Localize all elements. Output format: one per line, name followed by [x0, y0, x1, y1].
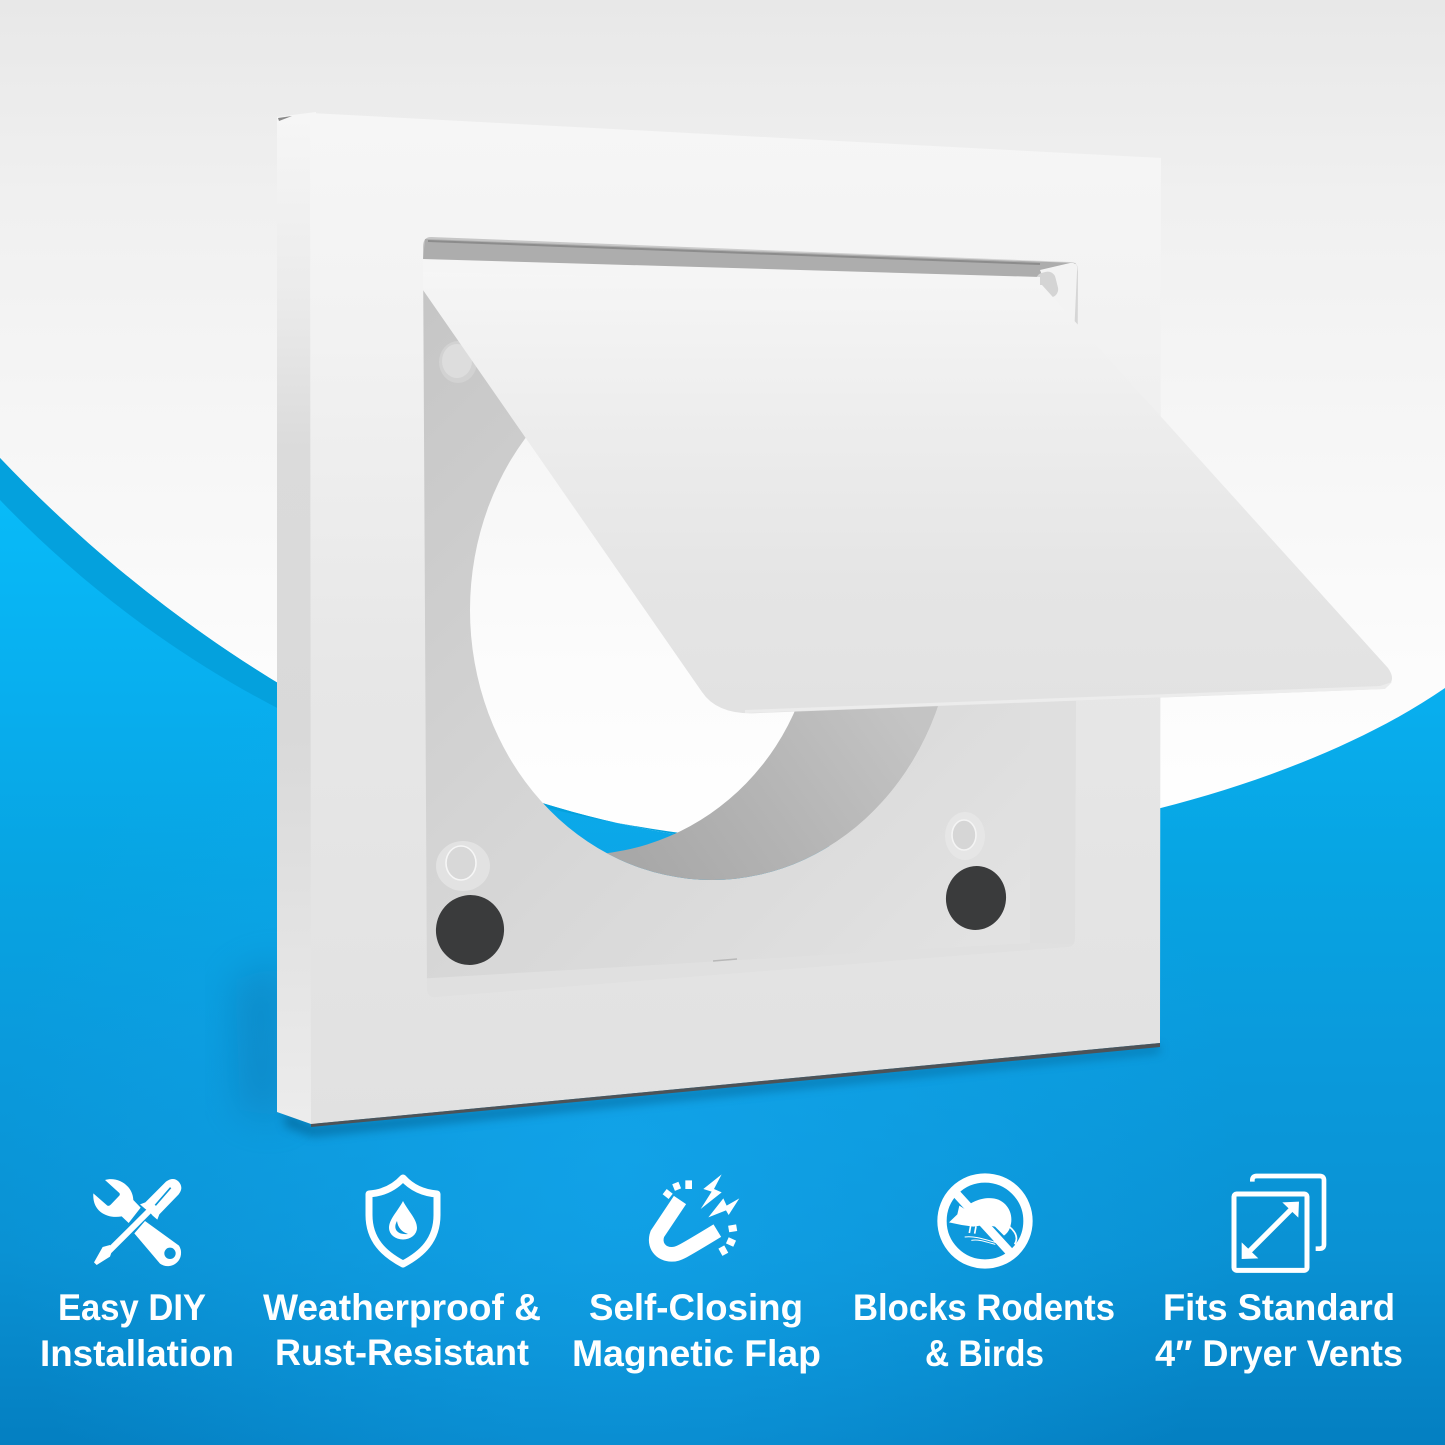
frame corner fold: [278, 116, 292, 121]
lip notch mark: [713, 959, 737, 961]
feature: blocks rodents and birds: [853, 1178, 1115, 1374]
icon: no rodents sign: [942, 1178, 1028, 1264]
icon: expand arrow squares: [1234, 1176, 1324, 1270]
magnet: right: [941, 861, 1011, 935]
label: & Birds: [925, 1333, 1044, 1374]
product: dryer vent cover: [235, 112, 1392, 1136]
label: [1155, 1287, 1403, 1374]
frame shadow: [235, 960, 1160, 1136]
magnet: left: [429, 888, 511, 972]
label: Weatherproof &: [263, 1287, 541, 1328]
hinge rod: [423, 259, 1040, 300]
icon: magnet with bolts: [656, 1174, 739, 1254]
right corner notch: [1040, 263, 1077, 335]
bottom inner lip: [415, 943, 1090, 1005]
screw hole: upper left: [439, 341, 477, 383]
label: [572, 1287, 821, 1374]
frame bottom edge: [311, 1043, 1160, 1127]
feature: easy DIY installation: [40, 1179, 234, 1374]
label: [853, 1287, 1115, 1374]
flap: [423, 272, 1392, 713]
label: Installation: [40, 1333, 234, 1374]
icon: shield with water drop: [369, 1178, 437, 1264]
label: Self-Closing: [589, 1287, 803, 1328]
icon: wrench and screwdriver: [93, 1179, 181, 1266]
feature: fits standard 4 inch dryer vents: [1155, 1176, 1403, 1374]
label: Blocks Rodents: [853, 1287, 1115, 1328]
hinge shadow line: [428, 241, 1040, 264]
label: [40, 1287, 234, 1374]
flap front lip highlight: [745, 682, 1392, 713]
duct tube interior: [607, 706, 938, 880]
right inner wall: [1030, 700, 1090, 955]
frame front face: [310, 113, 1161, 1124]
back plate with round opening: [415, 230, 1090, 1005]
label: 4″ Dryer Vents: [1155, 1333, 1403, 1374]
feature: weatherproof and rust-resistant: [263, 1178, 541, 1373]
label: Easy DIY: [58, 1287, 206, 1328]
label: [263, 1287, 541, 1373]
hinge channel: [423, 239, 1076, 278]
label: Fits Standard: [1163, 1287, 1395, 1328]
frame left side: [277, 112, 316, 1126]
label: Rust-Resistant: [275, 1332, 529, 1373]
label: Magnetic Flap: [572, 1333, 821, 1374]
screw hole: lower right: [945, 812, 985, 860]
screw hole: lower left: [436, 841, 490, 891]
hinge pin: [1034, 270, 1060, 300]
feature: self-closing magnetic flap: [572, 1174, 821, 1374]
